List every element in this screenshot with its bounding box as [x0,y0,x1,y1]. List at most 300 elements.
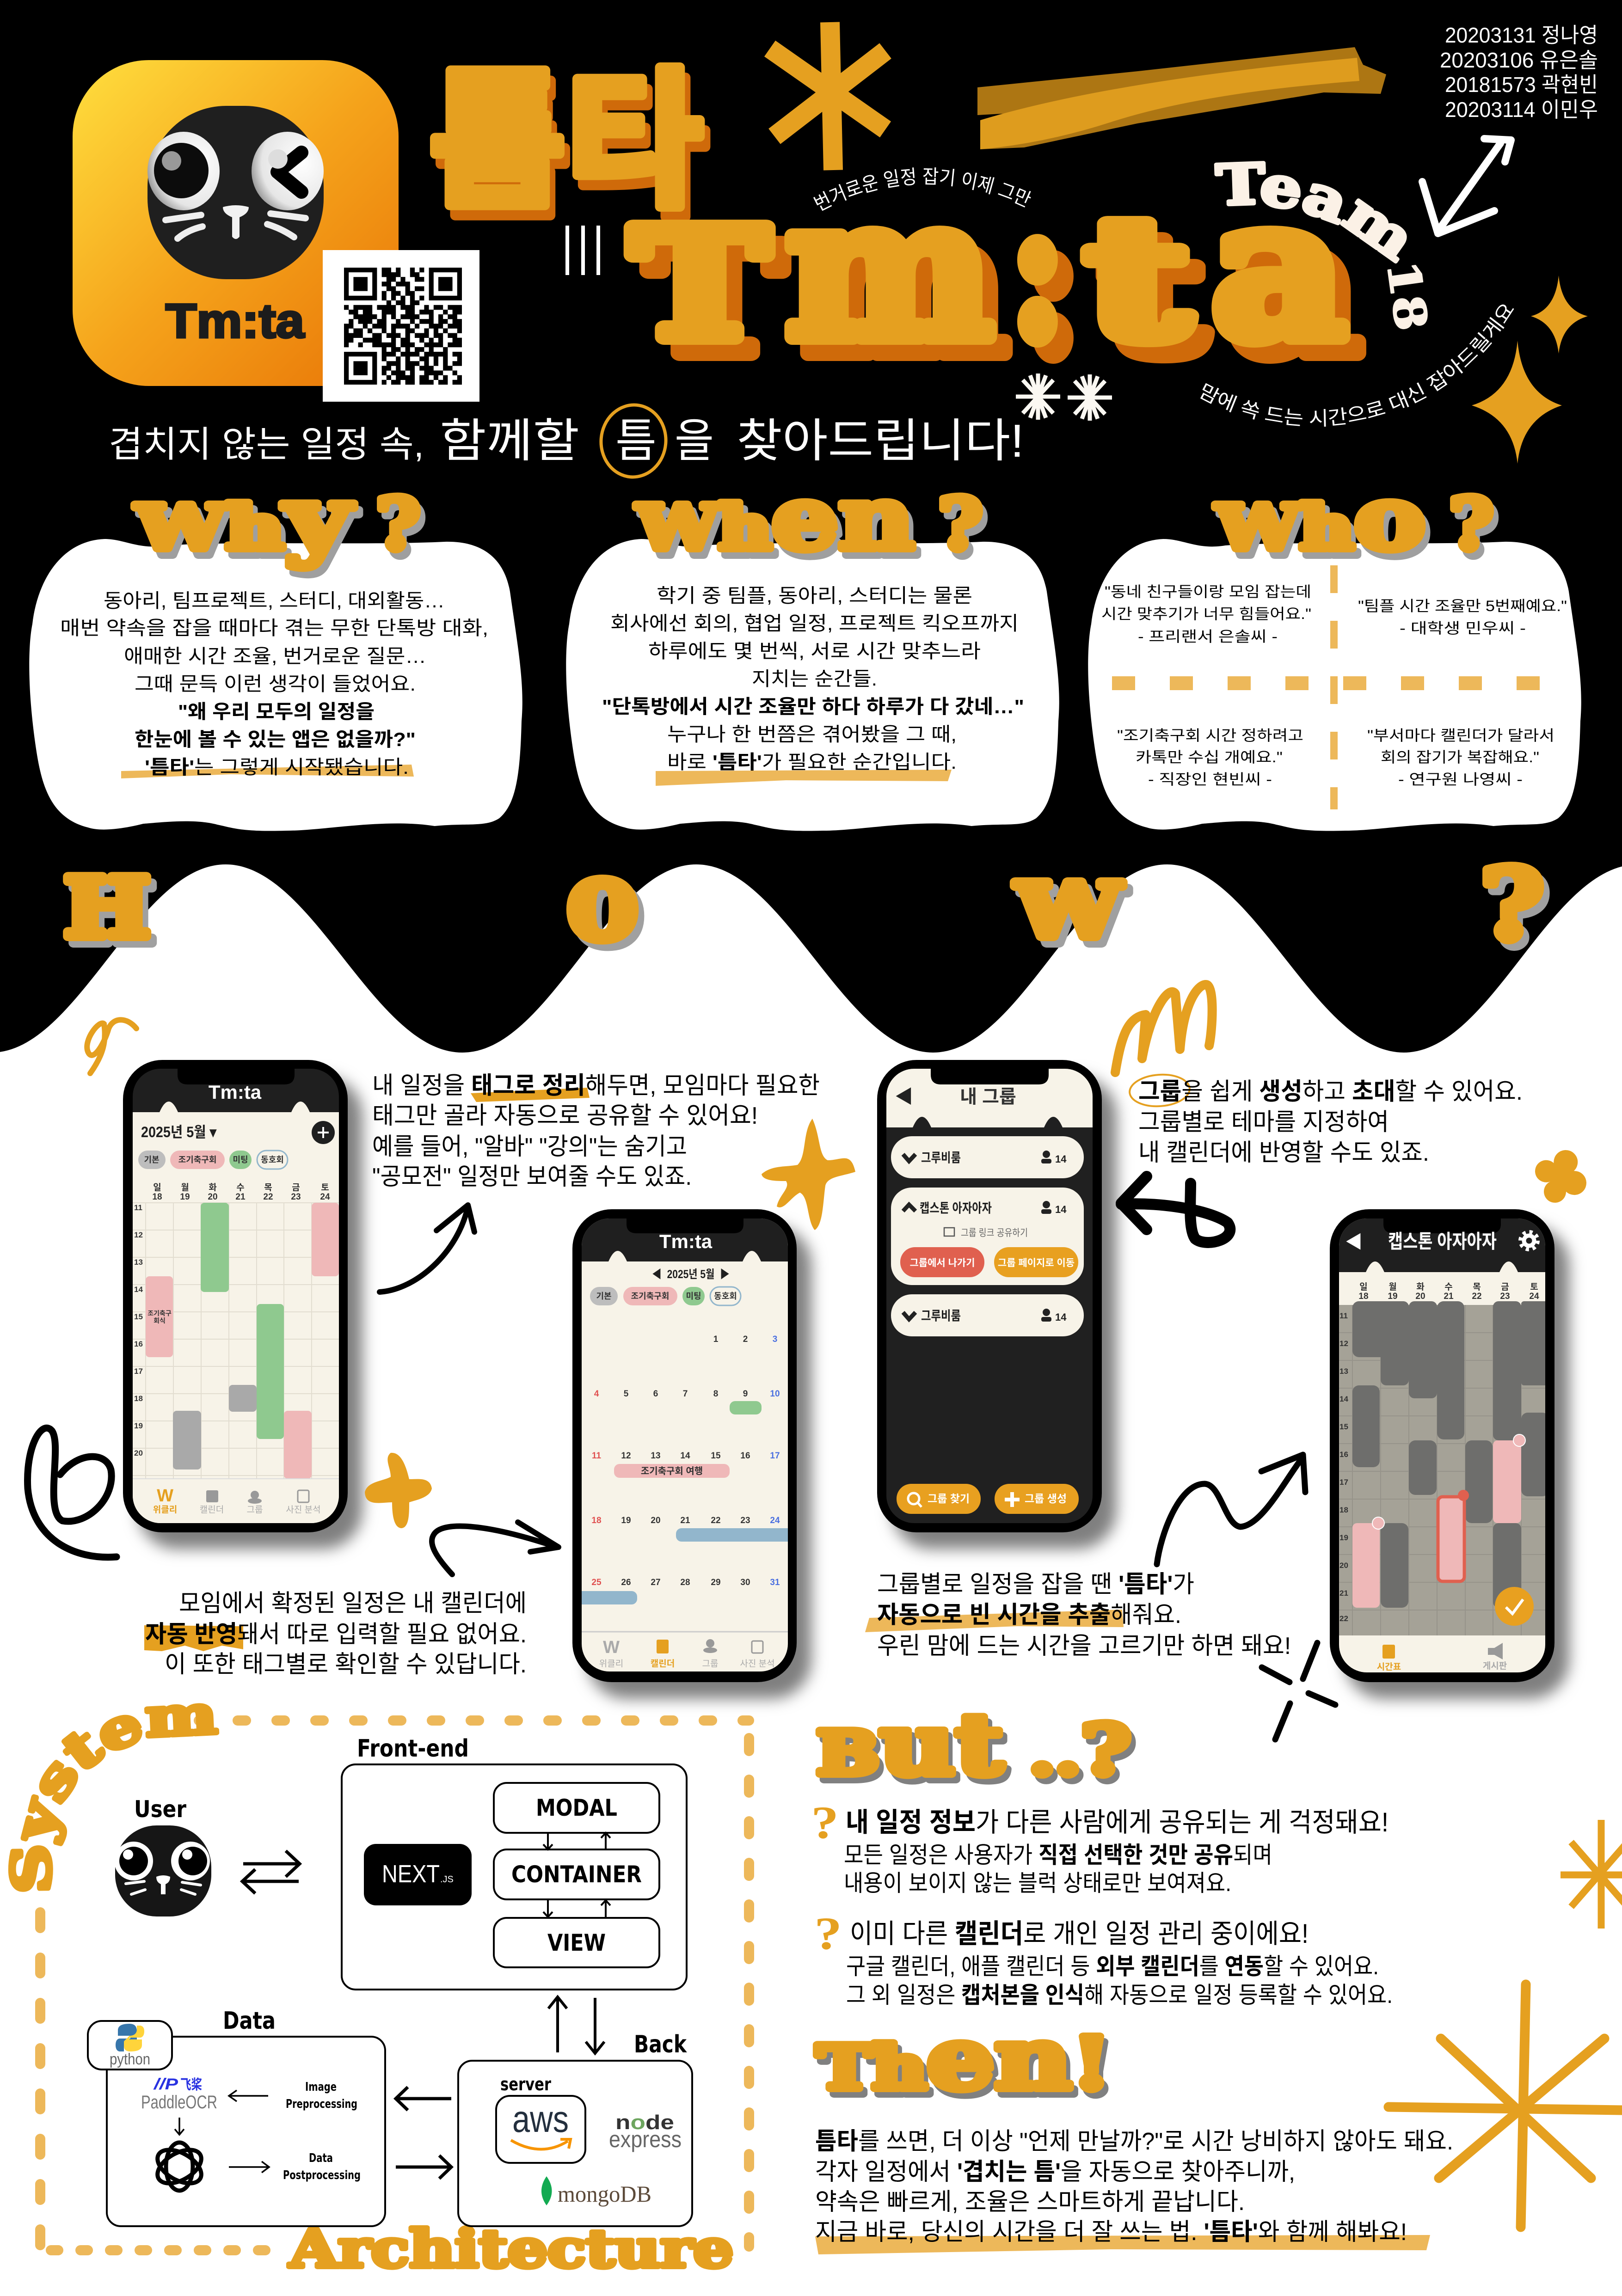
hours: 19 [1339,1533,1348,1542]
modal: MODAL [536,1794,617,1821]
bottom nav: 그룹 [702,1659,718,1669]
phone: timetable: ◀ [1345,1233,1363,1252]
phone: group list: 내 그룹 [960,1087,1016,1107]
day labels: 토 [1530,1282,1538,1292]
next.js logo: .JS [440,1874,454,1885]
dates: 25 [591,1578,602,1587]
tag chips: 기본 [596,1292,612,1301]
text: Team [1215,152,1426,273]
white double asterisks [1016,373,1112,421]
heading: When?: ? [938,483,983,566]
title: Tm:ta [631,155,1347,383]
app icon [73,60,399,386]
icon label Tm:ta: Tm:ta [166,294,305,348]
why text: "왜 우리 모두의 일정을 [178,701,375,722]
cat face [147,106,324,279]
modal [494,1783,659,1833]
dates: 29 [711,1578,721,1587]
month: 2025년 5월 ▾ [141,1124,217,1140]
callout: calendar: 이 또한 태그별로 확인할 수 있답니다. [165,1651,527,1678]
day labels: 일 [153,1182,161,1193]
mongodb logo: mongoDB [558,2181,651,2207]
text: 번거로운 일정 잡기 이제 그만 [811,165,1034,215]
dates: 21 [680,1516,690,1525]
dates: 1 [713,1335,719,1344]
when text: 누구나 한 번쯤은 겪어봤을 그 때, [667,723,957,745]
quote 3: - 직장인 현빈씨 - [1148,771,1272,788]
quote 3: "조기축구회 시간 정하려고 [1117,727,1303,744]
dates: 19 [621,1516,631,1525]
paddle logo: //P [153,2076,178,2093]
panel: who [1088,466,1581,831]
day labels [152,1182,330,1202]
day labels: 월 [181,1182,189,1193]
heading: Architecture: Architecture [289,2219,733,2279]
data steps: Preprocessing [286,2097,357,2111]
view [494,1918,659,1967]
tag chips: 동호회 [261,1155,284,1164]
team members: 20203131 정나영 [1445,23,1598,47]
paddle logo [141,2076,217,2112]
question 2: 이미 다른 캘린더로 개인 일정 관리 중이에요! [850,1919,1309,1949]
text: 맘에 쏙 드는 시간으로 대신 잡아드릴게요 [1196,299,1519,429]
data steps: Data [309,2151,333,2165]
dates: 22 [711,1516,721,1525]
highlight [656,770,952,786]
question 1: 내용이 보이지 않는 블럭 상태로만 보여져요. [844,1870,1231,1896]
arc text: bottom [1198,310,1514,425]
dates: 3 [773,1335,777,1344]
user: User [134,1796,186,1823]
arrow: to callout [380,1205,474,1292]
when text: 회사에선 회의, 협업 일정, 프로젝트 킥오프까지 [610,612,1019,634]
day labels: 23 [291,1192,301,1202]
quote 1: "동네 친구들이랑 모임 잡는데 [1105,583,1311,600]
hours: 18 [1339,1506,1348,1514]
tag chips: 조기축구회 [631,1292,669,1301]
quote 4: 회의 잡기가 복잡해요." [1381,749,1539,765]
arrows: front and back [548,1997,604,2053]
tag chips [590,1287,741,1305]
callout: calendar: 모임에서 확정된 일정은 내 캘린더에 [179,1590,527,1617]
heading: Who?: Wh o [1215,466,1425,569]
heading: H o W ? [64,834,1544,965]
small asterisk [1561,1820,1622,1929]
day labels: 18 [152,1192,162,1202]
callout: group: 그룹별로 테마를 지정하여 [1138,1109,1389,1136]
tagline [109,402,1024,480]
callout: auto extract: 우린 맘에 드는 시간을 고르기만 하면 돼요! [877,1633,1291,1659]
callout: group [1129,1073,1523,1166]
why text: '틈타'는 그렇게 시작됐습니다. [145,756,409,778]
title: Tm:ta: a [1211,155,1347,383]
bottom nav: 캘린더 [651,1659,675,1669]
hours: 14 [134,1285,143,1294]
when text: 지치는 순간들. [752,668,877,690]
data: Data [223,2007,276,2035]
dates: 4 [594,1389,599,1399]
why text: 한눈에 볼 수 있는 앱은 없을까?" [135,729,416,750]
arrows: back and data [396,2087,451,2179]
header: Tm:ta [209,1081,262,1103]
quote 3: 카톡만 수십 개예요." [1136,749,1283,765]
hours: 21 [1339,1589,1348,1598]
day labels: 20 [1415,1292,1425,1301]
quote 4 [1367,727,1554,788]
hours: 15 [1339,1422,1348,1431]
title: 틈타: 틈타 [429,57,703,225]
bottom nav [1377,1643,1507,1672]
hours: 19 [134,1421,143,1430]
dates: 7 [683,1389,688,1399]
day labels: 19 [1388,1292,1398,1301]
title: Tm:ta: m [786,155,994,383]
bottom nav: W [603,1638,620,1657]
black scribble [28,1428,117,1557]
dates: 30 [740,1578,750,1587]
schedule blocks: 회식 [154,1317,166,1324]
heading: Who?: ? [1449,483,1493,566]
orange star [762,1119,855,1230]
team members: 20203114 이민우 [1445,98,1598,122]
aws logo: aws [512,2098,569,2140]
day labels: 21 [235,1192,246,1202]
day labels: 21 [1444,1292,1454,1301]
tag chips: 동호회 [714,1292,737,1301]
day labels: 24 [320,1192,330,1202]
tag chips: 기본 [144,1155,160,1164]
dashed cross [1112,565,1549,809]
aws logo [496,2096,585,2163]
dates: 10 [770,1389,780,1399]
heading: Why? [135,466,420,569]
why text: 매번 약속을 잡을 때마다 겪는 무한 단톡방 대화, [60,617,488,639]
dates: 28 [680,1578,690,1587]
view: VIEW [547,1929,606,1956]
events: 조기축구회 여행 [641,1466,703,1476]
day labels: 22 [263,1192,273,1202]
day labels: 월 [1389,1282,1397,1292]
callout: group: 그룹을 쉽게 생성하고 초대할 수 있어요. [1138,1078,1523,1105]
group card 2 [891,1188,1084,1285]
callout: calendar: 자동 반영돼서 따로 입력할 필요 없어요. [145,1621,527,1648]
callout: calendar [144,1590,527,1678]
conclusion text: 각자 일정에서 '겹치는 틈'을 자동으로 찾아주니까, [815,2159,1295,2186]
callout: auto extract: 그룹별로 일정을 잡을 땐 '틈타'가 [877,1571,1194,1598]
hours: 13 [1339,1367,1348,1376]
schedule blocks: 조기축구 [147,1310,172,1317]
day labels: 토 [321,1183,329,1193]
hours: 14 [1339,1395,1348,1403]
question 1: 내 일정 정보가 다른 사람에게 공유되는 게 걱정돼요! [846,1807,1389,1837]
bottom nav: 시간표 [1377,1662,1401,1672]
phone: weekly [123,1060,348,1532]
bottom nav: W [157,1486,173,1506]
quote 2: "팀플 시간 조율만 5번째예요." [1358,598,1567,614]
quote 2 [1358,598,1567,637]
tagline: 겹치지 않는 일정 속, [109,424,424,465]
title: Tm:ta: : [1009,155,1066,383]
hours [134,1203,143,1457]
group card 2: 14 [1055,1204,1067,1215]
dates: 8 [713,1389,718,1399]
bottom nav: 위클리 [599,1659,623,1669]
gear [1520,1232,1538,1249]
team number: 18 [1376,258,1437,334]
why text: 동아리, 팀프로젝트, 스터디, 대외활동… [104,590,445,612]
day labels [1358,1282,1539,1301]
when text: 하루에도 몇 번씩, 서로 시간 맞추느라 [648,640,981,662]
callout: auto extract: 자동으로 빈 시간을 추출해줘요. [877,1602,1181,1629]
hours: 11 [134,1203,142,1212]
back: server [500,2074,551,2094]
group card 2: 그룹 링크 공유하기 [961,1228,1028,1238]
dates: 9 [743,1389,748,1399]
day labels: 수 [236,1182,245,1193]
QR code [323,250,479,402]
heading: Why?: Wh y [135,466,354,569]
dates [591,1335,780,1587]
question 2: ? [814,1908,842,1959]
hours: 13 [134,1258,143,1267]
hours: 22 [1339,1614,1348,1623]
callout: tags: 예를 들어, "알바" "강의"는 숨기고 [372,1133,687,1160]
day labels: 24 [1529,1292,1539,1301]
add button [312,1121,335,1144]
dates: 20 [651,1516,661,1525]
bottom nav [599,1638,775,1669]
group card 1: 14 [1055,1153,1067,1165]
day labels: 화 [1416,1282,1425,1292]
panel: system architecture: System [0,1684,219,1894]
dates: 16 [740,1451,750,1461]
day labels: 금 [1501,1282,1509,1292]
node logo: node [615,2111,674,2134]
team members: 20203106 유은솔 [1440,48,1598,72]
container: CONTAINER [511,1861,642,1888]
bottom nav [153,1486,321,1515]
tick marks [1262,1643,1335,1739]
hours: 16 [134,1340,143,1348]
month nav: ◀ 2025년 5월 ▶ [652,1268,730,1281]
dates: 6 [653,1389,658,1399]
day labels: 목 [1473,1282,1481,1292]
next.js logo [364,1844,472,1905]
quote 1: - 프리랜서 은솔씨 - [1138,628,1278,645]
quote 4: - 연구원 나영씨 - [1398,771,1523,788]
bottom nav: 게시판 [1483,1661,1507,1671]
hours: 15 [134,1312,143,1321]
quote 3 [1117,727,1303,788]
heading: When?: When [636,466,915,569]
question 1 [811,1797,1389,1896]
circled 틈: 틈 [615,415,657,467]
heading: System [50,1734,194,1893]
group card 3 [891,1294,1084,1336]
team members: 20181573 곽현빈 [1445,73,1598,97]
heading: Why?: ? [376,483,420,566]
when text: 바로 '틈타'가 필요한 순간입니다. [667,751,957,773]
group card 2: 그룹에서 나가기 [909,1258,975,1268]
dates: 11 [592,1451,601,1461]
busy blocks [1352,1301,1549,1608]
dates: 31 [770,1578,780,1587]
front-end [342,1735,687,1990]
tagline: 찾아드립니다! [737,415,1024,467]
express logo: express [609,2126,682,2152]
user [114,1796,211,1916]
when text [602,585,1024,773]
dates: 24 [770,1516,780,1525]
triple bars [567,226,598,275]
when text: "단톡방에서 시간 조율만 하다 하루가 다 갔네…" [602,696,1024,717]
hours: 16 [1339,1450,1348,1459]
arrow: user to front-end [242,1851,300,1893]
paddle logo: 飞桨 [180,2077,202,2093]
hours [1339,1311,1348,1623]
next.js logo: NEXT [382,1860,440,1888]
day labels: 화 [209,1182,217,1193]
paddle logo: PaddleOCR [141,2092,217,2112]
heading: H o W ?: W [1015,867,1122,955]
question 1: 모든 일정은 사용자가 직접 선택한 것만 공유되며 [844,1842,1272,1868]
panel: why [29,466,522,831]
arrow: to group list [1121,1176,1230,1243]
callout: auto extract [865,1571,1291,1659]
heading: Then!: Th en ! [817,2008,1111,2109]
callout: group: 내 캘린더에 반영할 수도 있죠. [1138,1139,1429,1166]
phone: group list: ◀ [895,1087,913,1107]
openai logo [152,2143,207,2191]
group card 2: 그룹 페이지로 이동 [998,1258,1075,1268]
title: Tm:ta: T [631,196,768,373]
dates: 26 [621,1578,631,1587]
phone: calendar [572,1209,797,1682]
events [573,1401,796,1604]
callout: tags [372,1072,820,1190]
callout: tags: 내 일정을 태그로 정리해두면, 모임마다 필요한 [372,1072,820,1099]
schedule blocks [146,1203,339,1479]
hours: 17 [134,1367,143,1376]
tagline: 함께할 [440,415,579,467]
bottom nav: 사진 분석 [286,1505,321,1515]
arc text: team [1217,204,1392,261]
picked slots [1352,1434,1525,1608]
arrow: to calendar [432,1522,559,1574]
day labels: 일 [1359,1282,1368,1292]
back: Back [634,2031,687,2058]
highlight [121,765,414,778]
orange clover [1526,1142,1596,1212]
callout: tags: "공모전" 일정만 보여줄 수도 있죠. [372,1163,692,1190]
dates: 12 [621,1451,631,1461]
quote 1: 시간 맞추기가 너무 힘들어요." [1101,606,1311,622]
panel: system architecture [0,1684,749,2279]
tag chips: 미팅 [233,1155,248,1164]
conclusion text: 틈타를 쓰면, 더 이상 "언제 만날까?"로 시간 낭비하지 않아도 돼요. [815,2128,1453,2155]
title: Tm:ta: t [1085,181,1191,376]
bottom nav: 위클리 [153,1505,177,1515]
python logo: python [110,2051,150,2068]
team members [1440,23,1598,122]
tag chips [138,1151,288,1169]
front-end: Front-end [357,1735,469,1763]
hours: 17 [1339,1478,1348,1487]
quote 2: - 대학생 민우씨 - [1400,620,1526,637]
dates: 2 [743,1335,748,1344]
question 2: 그 외 일정은 캡처본을 인식해 자동으로 일정 등록할 수 있어요. [846,1982,1393,2008]
why text [60,590,488,778]
tag chips: 미팅 [686,1292,701,1301]
decorative orange asterisk [770,22,885,170]
orange plus [365,1453,432,1528]
day labels: 수 [1444,1282,1453,1292]
dates: 14 [680,1451,690,1461]
arrow: double headed white [1422,139,1511,233]
quote 4: "부서마다 캘린더가 달라서 [1367,727,1554,744]
data steps: Postprocessing [283,2168,361,2182]
data [88,2007,385,2226]
day labels: 금 [292,1183,300,1193]
conclusion text [815,2128,1453,2254]
why text: 그때 문득 이런 생각이 들었어요. [135,673,416,695]
bottom nav: 캘린더 [200,1505,224,1515]
orange scribble [1115,985,1212,1072]
day labels: 23 [1500,1292,1510,1301]
arc text: top [818,183,1036,212]
bottom buttons: 그룹 찾기 [928,1493,970,1505]
python logo [88,2021,172,2069]
why text: 애매한 시간 조율, 번거로운 질문… [124,645,426,667]
question 2 [814,1908,1393,2008]
hours: 18 [134,1394,143,1403]
circled 틈 [598,402,669,480]
quote 1 [1101,583,1311,645]
user cat icon [114,1825,211,1916]
data steps: Image [305,2080,337,2094]
brush stroke [977,47,1386,149]
day labels: 19 [180,1192,190,1202]
heading: H o W ?: H [64,859,150,956]
phone: timetable: 캡스톤 아자아자 [1388,1231,1497,1252]
conclusion text: 약속은 빠르게, 조율은 스마트하게 끝납니다. [815,2189,1245,2216]
dates: 15 [711,1451,721,1461]
day labels: 18 [1358,1292,1369,1301]
heading: H o W ?: ? [1481,847,1544,961]
dates: 18 [591,1516,602,1525]
day labels: 목 [264,1183,272,1193]
conclusion text: 지금 바로, 당신의 시간을 더 잘 쓰는 법. '틈타'와 함께 해봐요! [815,2219,1407,2246]
question 1: ? [811,1797,839,1848]
when text: 학기 중 팀플, 동아리, 스터디는 물론 [657,585,972,606]
hours: 20 [134,1449,143,1457]
dates: 27 [651,1578,661,1587]
group card 1: 그루비룸 [921,1151,961,1165]
bottom nav: 그룹 [247,1505,263,1515]
hours: 12 [134,1231,143,1239]
hours: 20 [1339,1561,1348,1570]
hours: 11 [1339,1311,1348,1320]
panel: when [566,466,1059,831]
big asterisk [1389,1984,1622,2227]
phone: calendar: Tm:ta [659,1231,713,1252]
phone: group list [877,1060,1102,1532]
sparkle large [1472,341,1562,464]
orange squiggle [87,1020,136,1073]
day labels: 22 [1472,1292,1482,1301]
group card 2: 캡스톤 아자아자 [920,1201,992,1215]
dates: 17 [770,1451,780,1461]
